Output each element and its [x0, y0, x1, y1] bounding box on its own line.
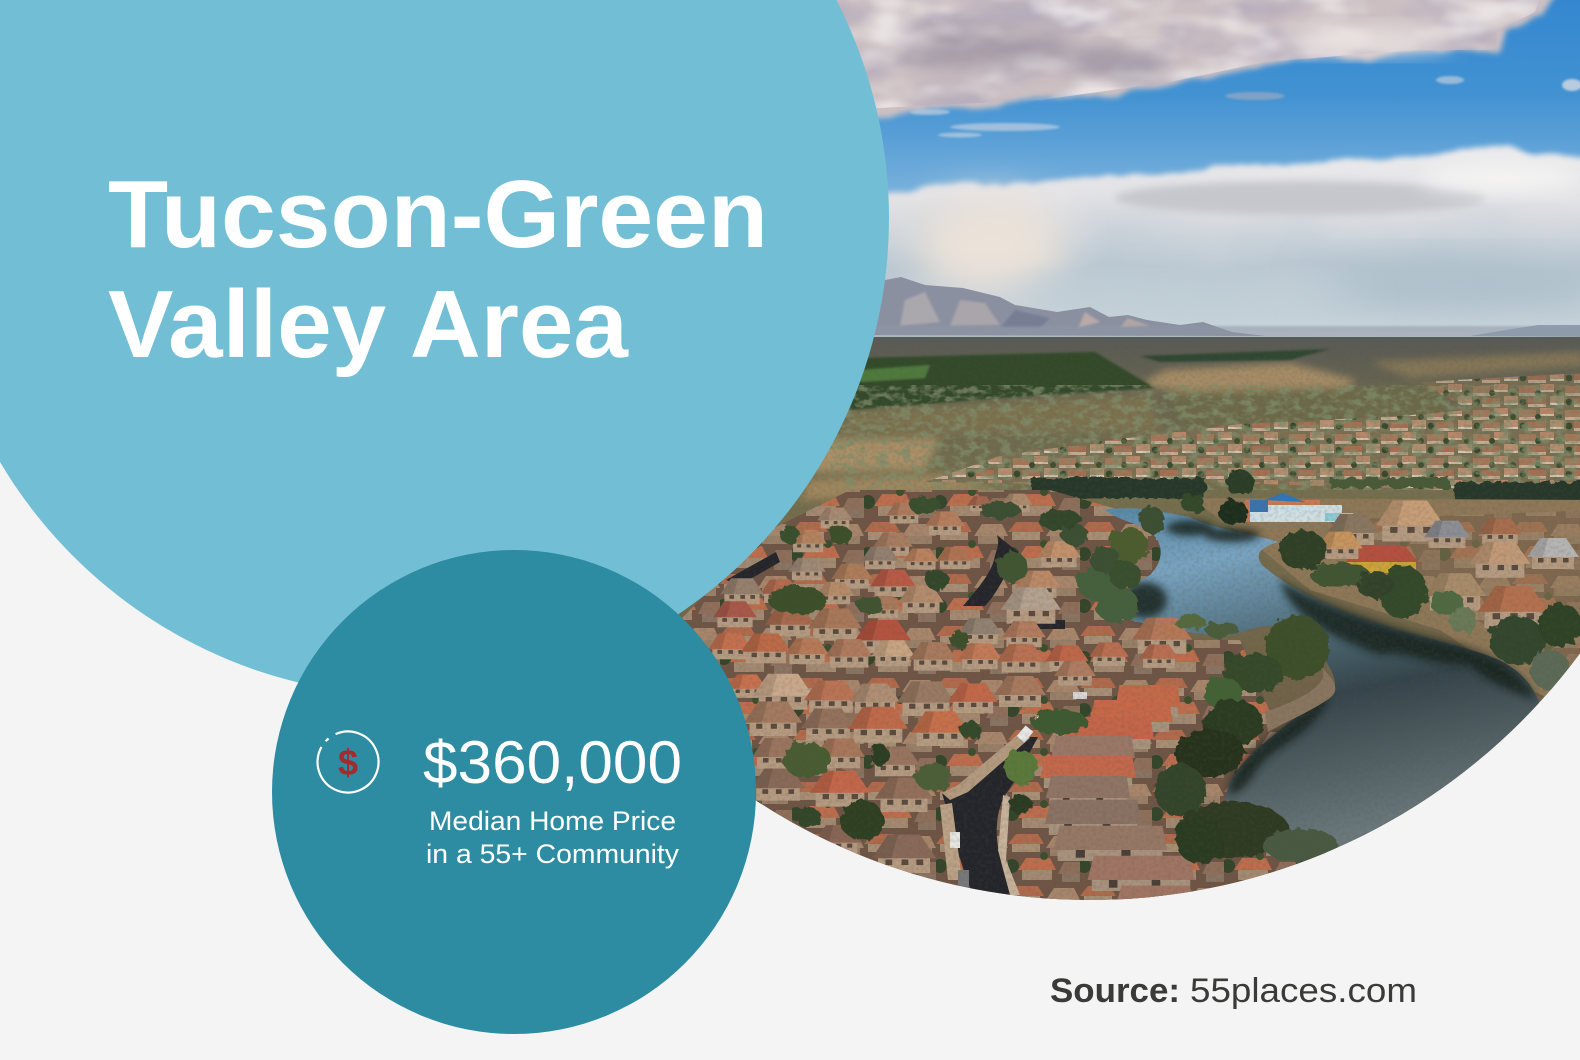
source line [1050, 972, 1417, 1010]
upper mauve cloud [820, 0, 1556, 115]
light blue main circle [0, 0, 889, 696]
houses: long roofs along the road [1040, 685, 1194, 908]
desert ground [678, 337, 1580, 900]
stat caption: Median Home Price [429, 806, 676, 836]
lake [1105, 508, 1540, 860]
houses: front rows [744, 701, 969, 873]
title: Valley Area [108, 271, 629, 378]
photo grain [680, 345, 1580, 915]
roads [726, 535, 1065, 900]
dark green field [850, 349, 1330, 410]
dark teal stat circle [272, 550, 756, 1034]
left neighbourhood ground with dense roofs [660, 490, 1340, 920]
title: Tucson-Green [108, 161, 768, 268]
sky [878, 0, 1580, 196]
source line: 55places.com [1190, 972, 1417, 1010]
houses: middle rows [708, 601, 1192, 716]
title [108, 161, 768, 378]
tan scrub patches [800, 352, 1580, 500]
icon: dollar in ring [308, 722, 388, 802]
ground scrub texture [830, 385, 1580, 490]
houses: rear rows [720, 494, 1081, 624]
tree line beyond lake [1030, 476, 1580, 500]
lower white cloud bank [860, 142, 1580, 345]
icon: dollar in ring: $ [338, 742, 358, 783]
far town band [925, 398, 1580, 495]
lake peninsula path [1265, 668, 1335, 732]
trees [768, 470, 1580, 864]
lake dark reflections [1123, 520, 1536, 795]
houses: right bank [1317, 501, 1579, 628]
sidewalks and cars [940, 692, 1087, 895]
mountains [850, 277, 1580, 338]
wispy clouds [910, 76, 1580, 138]
photo: aerial view of lakeside community in a circle [678, 0, 1580, 900]
resort pool area [1245, 493, 1353, 522]
right bank ground [1202, 498, 1580, 696]
stat value: $360,000 [423, 729, 682, 796]
stat caption: in a 55+ Community [426, 839, 680, 869]
source line: Source: [1050, 972, 1180, 1010]
stat caption [426, 806, 680, 869]
